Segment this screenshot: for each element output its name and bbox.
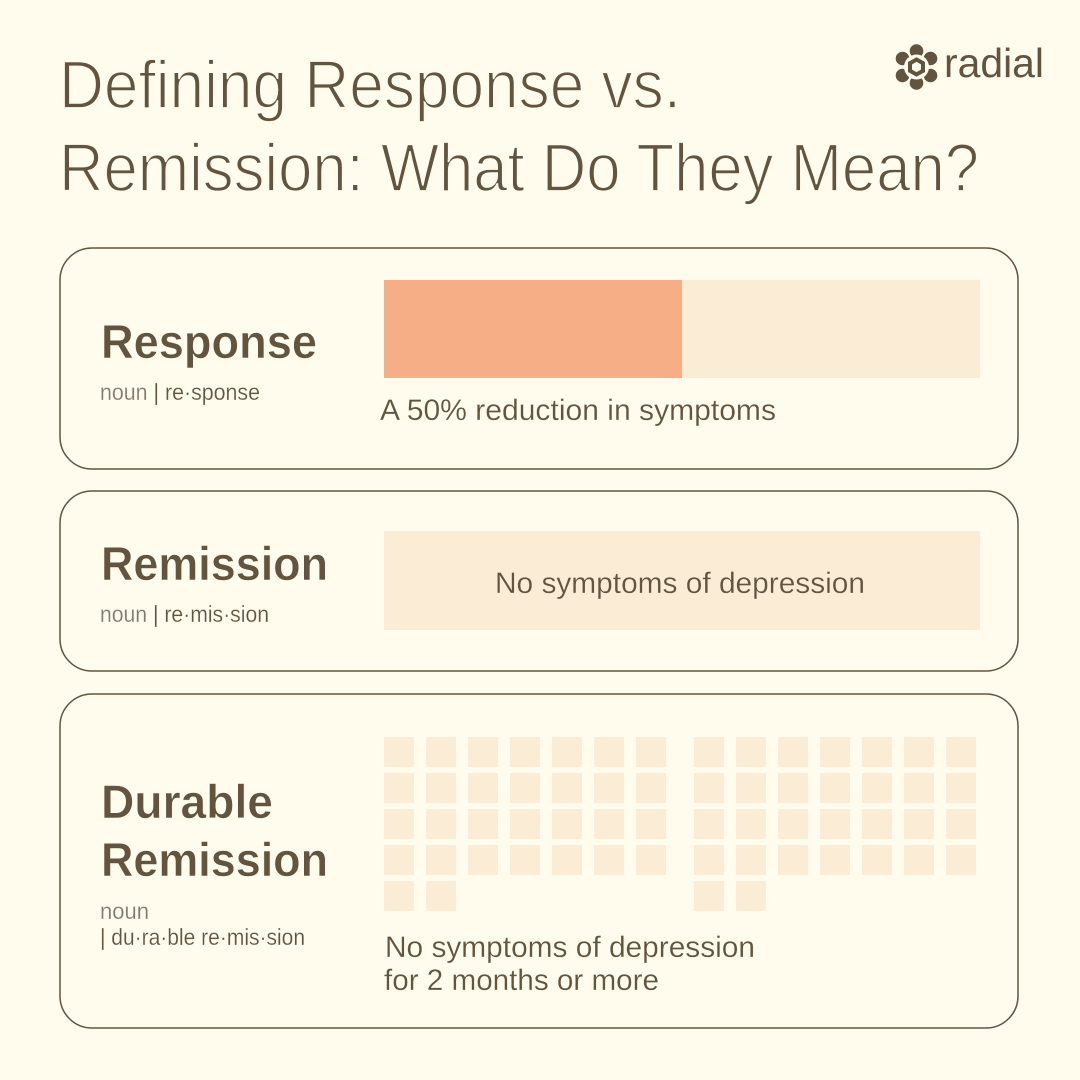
panel: remission bbox=[60, 491, 1018, 671]
pronunciation: remission: noun | re·mis·sion bbox=[100, 601, 269, 627]
full bar bbox=[384, 531, 980, 630]
heading: durable remission: Remission bbox=[101, 833, 328, 886]
icon: flower mark bbox=[896, 44, 937, 90]
logo: radial bbox=[896, 40, 1044, 90]
calendar grid: month 2 bbox=[694, 737, 976, 911]
heading: durable remission bbox=[101, 775, 328, 886]
caption: durable remission bbox=[384, 931, 755, 997]
title: Defining Response vs. bbox=[59, 47, 681, 123]
caption: durable remission: for 2 months or more bbox=[384, 964, 659, 997]
pronunciation: durable remission bbox=[100, 898, 305, 950]
caption: remission: No symptoms of depression bbox=[495, 567, 865, 600]
heading: response: Response bbox=[101, 315, 317, 368]
heading: durable remission: Durable bbox=[101, 775, 273, 828]
pronunciation: response: noun | re·sponse bbox=[100, 379, 260, 405]
caption: response: A 50% reduction in symptoms bbox=[380, 394, 776, 427]
panel: response bbox=[60, 248, 1018, 469]
heading: remission: Remission bbox=[101, 537, 328, 590]
calendar grid: month 1 bbox=[384, 737, 666, 911]
caption: durable remission: No symptoms of depression bbox=[385, 931, 755, 964]
panel: durable remission bbox=[60, 694, 1018, 1028]
wordmark: radial bbox=[944, 40, 1044, 86]
bar chart: 50% reduction bbox=[384, 280, 980, 378]
pronunciation: durable remission: | du·ra·ble re·mis·sion bbox=[100, 924, 305, 950]
title: Remission: What Do They Mean? bbox=[59, 130, 979, 206]
pronunciation: durable remission: noun bbox=[100, 898, 149, 924]
title bbox=[59, 47, 979, 206]
